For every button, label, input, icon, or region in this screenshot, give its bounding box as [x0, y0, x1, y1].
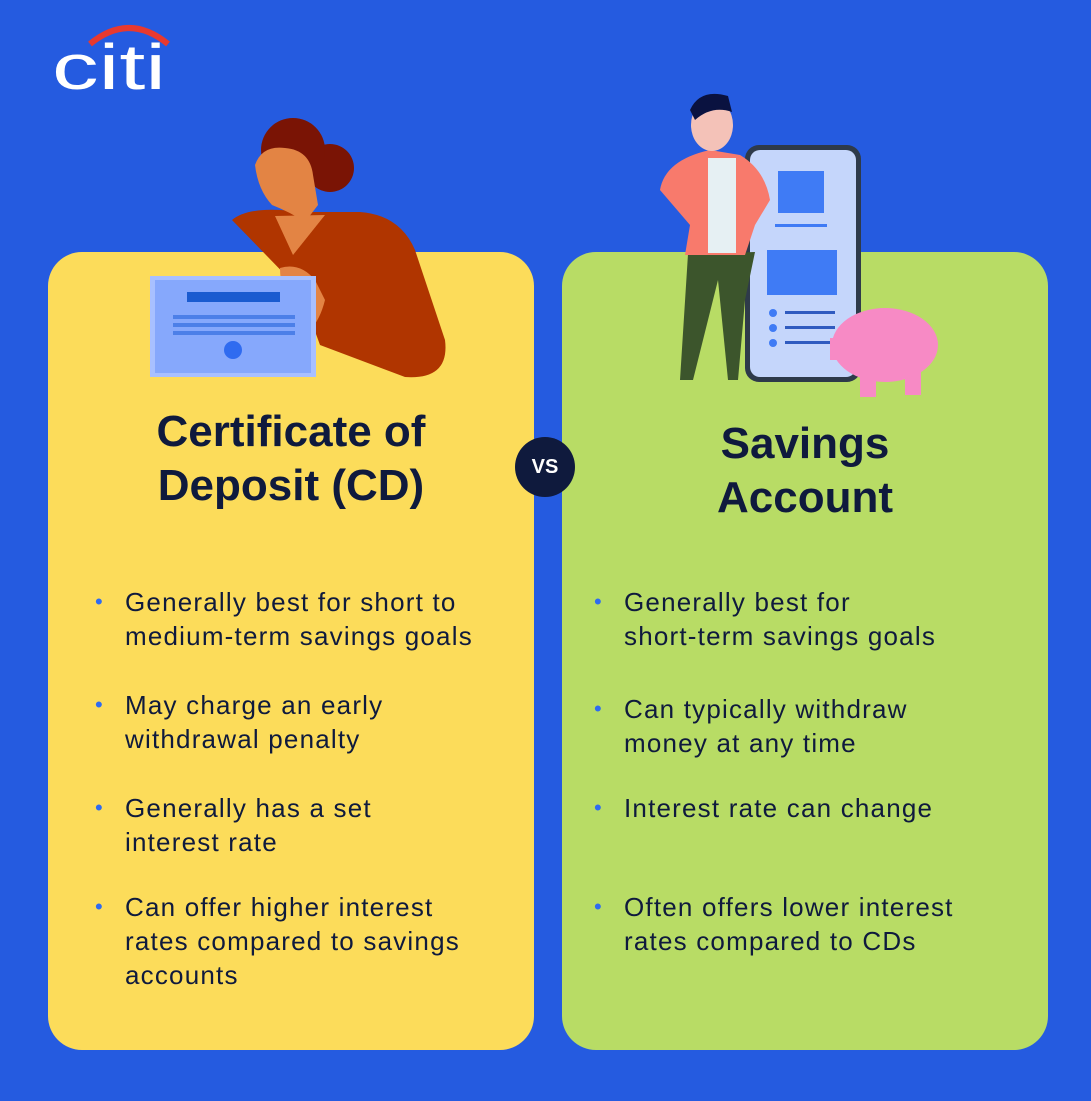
- panel: savings: [562, 252, 1048, 1050]
- bullet 2: [624, 692, 1044, 760]
- logo: citi: [52, 24, 170, 96]
- bullet 1: Generally best for: [624, 587, 851, 617]
- bullet 3: Interest rate can change: [624, 793, 933, 823]
- bullet 3: interest rate: [125, 827, 278, 857]
- bullet 2: Can typically withdraw: [624, 694, 908, 724]
- bullet 2: May charge an early: [125, 690, 383, 720]
- bullet 4: [624, 890, 1044, 958]
- bullet 4: rates compared to savings: [125, 926, 460, 956]
- bullet 1: short-term savings goals: [624, 621, 936, 651]
- title: savings: Savings: [721, 419, 889, 468]
- bullet 3: [125, 791, 545, 859]
- title: savings: [717, 419, 893, 522]
- bullet 4: accounts: [125, 960, 239, 990]
- bullet 2: [125, 688, 545, 756]
- title: CD: Certificate of: [157, 407, 425, 456]
- title: CD: [157, 407, 426, 510]
- bullet 4: [125, 890, 545, 992]
- vs badge: [515, 437, 575, 497]
- vs badge: VS: [532, 456, 558, 478]
- bullet 1: [624, 585, 1044, 653]
- bullet 1: [125, 585, 545, 653]
- title: CD: Deposit (CD): [158, 461, 424, 510]
- bullet 4: rates compared to CDs: [624, 926, 917, 956]
- illustration: man with phone and piggy bank: [660, 94, 938, 397]
- list: savings features: [594, 587, 954, 956]
- bullet 2: money at any time: [624, 728, 857, 758]
- panel: CD: [48, 252, 534, 1050]
- list: CD features: [96, 587, 473, 990]
- bullet 2: withdrawal penalty: [125, 724, 360, 754]
- bullet 1: Generally best for short to: [125, 587, 457, 617]
- illustration: woman with certificate: [150, 118, 446, 378]
- bullet 3: Generally has a set: [125, 793, 372, 823]
- bullet 4: Can offer higher interest: [125, 892, 433, 922]
- bullet 4: Often offers lower interest: [624, 892, 954, 922]
- bullet 1: medium-term savings goals: [125, 621, 473, 651]
- title: savings: Account: [717, 473, 893, 522]
